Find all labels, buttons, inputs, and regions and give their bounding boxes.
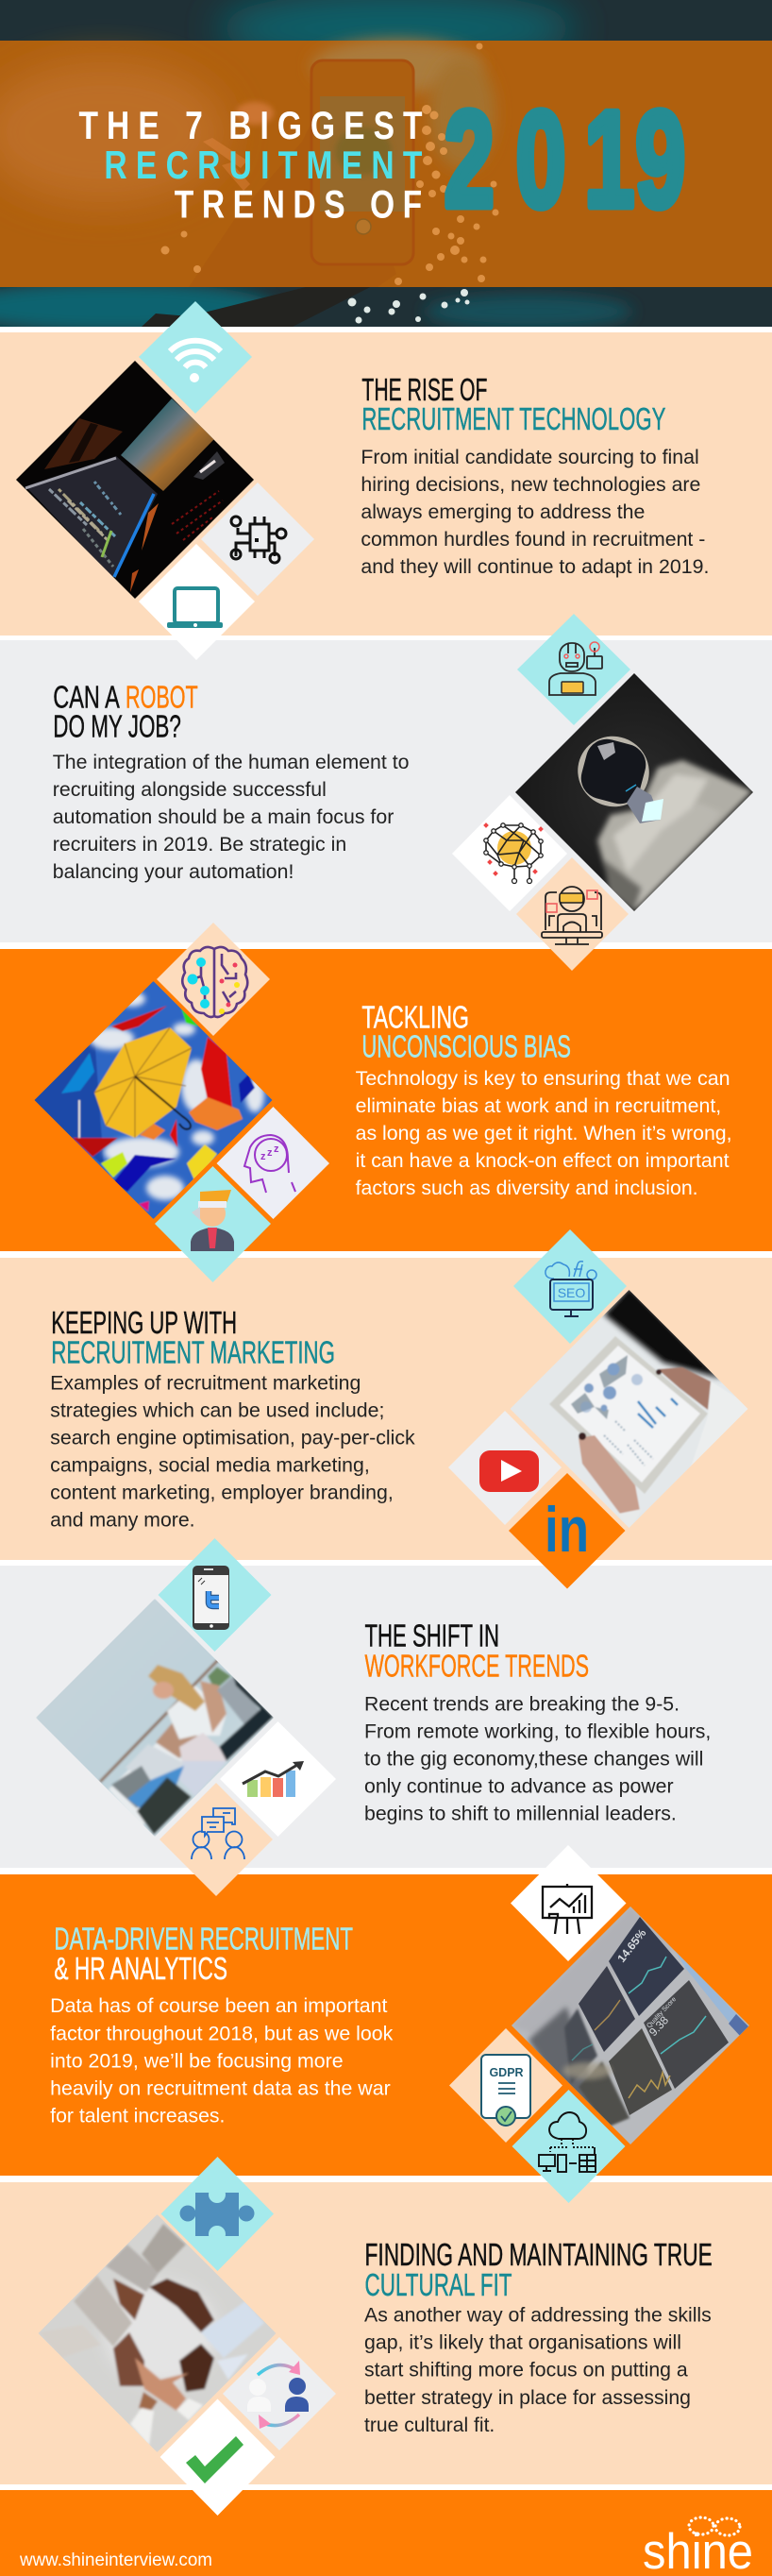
body text: factor throughout 2018, but as we look <box>50 2023 394 2044</box>
icon: sleeping head diamond: z <box>267 1147 273 1159</box>
section 7: finding and maintaining true cultural fit <box>38 2157 713 2516</box>
heading: UNCONSCIOUS BIAS <box>361 1029 571 1064</box>
photo: analytics dashboard: 9.38 <box>646 2013 671 2039</box>
photo: analytics dashboard: Quality Score <box>646 1996 678 2029</box>
heading <box>364 1618 589 1683</box>
icon: AI robot diamond <box>517 614 630 725</box>
heading: ROBOT <box>126 679 198 714</box>
icon: people talking diamond <box>159 1783 273 1896</box>
body text <box>50 1995 394 2127</box>
body text <box>50 1372 415 1532</box>
body text: From remote working, to flexible hours, <box>364 1720 711 1742</box>
body text: factors such as diversity and inclusion. <box>356 1178 698 1199</box>
icon: growth chart diamond <box>220 1721 336 1837</box>
body text: balancing your automation! <box>53 861 294 883</box>
heading <box>53 679 198 744</box>
body text: eliminate bias at work and in recruitment, <box>356 1095 721 1117</box>
title text <box>79 105 423 227</box>
section 6: data-driven recruitment and HR analytics <box>50 1845 750 2203</box>
body text: As another way of addressing the skills <box>364 2304 712 2327</box>
body text: hiring decisions, new technologies are <box>361 474 700 496</box>
body text: always emerging to address the <box>361 501 645 523</box>
body text: only continue to advance as power <box>364 1775 674 1797</box>
icon: SEO monitor diamond <box>513 1229 627 1344</box>
body text <box>364 2304 712 2436</box>
heading: WORKFORCE TRENDS <box>364 1648 589 1683</box>
body text: for talent increases. <box>50 2106 225 2127</box>
body text: heavily on recruitment data as the war <box>50 2077 391 2100</box>
heading: DO MY JOB? <box>53 709 181 744</box>
section 1: rise of recruitment technology <box>16 301 709 660</box>
icon: robot at monitor diamond <box>516 857 629 971</box>
icon: sleeping head diamond <box>217 1107 329 1219</box>
body text: From initial candidate sourcing to final <box>361 447 699 468</box>
panel background: section 6 <box>0 1874 772 2176</box>
section 2: can a robot do my job <box>53 614 753 971</box>
section 4: keeping up with recruitment marketing <box>50 1229 755 1588</box>
icon: phone with twitter diamond <box>159 1538 272 1652</box>
heading: & HR ANALYTICS <box>54 1951 227 1986</box>
icon: person swap diamond <box>223 2337 336 2450</box>
body text: as long as we get it right. When it’s wrong, <box>356 1123 732 1144</box>
body text: recruiters in 2019. Be strategic in <box>53 834 346 856</box>
orange overlay band <box>0 41 772 287</box>
icon: sleeping head diamond: z <box>274 1144 279 1155</box>
body text: recruiting alongside successful <box>53 779 327 801</box>
icon: brain diamond <box>157 923 270 1036</box>
body text: The integration of the human element to <box>53 752 410 773</box>
heading: CAN A <box>53 679 120 714</box>
icon: sleeping head diamond: z <box>260 1151 266 1162</box>
body text: better strategy in place for assessing <box>364 2387 691 2409</box>
icon: check mark diamond <box>160 2398 276 2516</box>
body text: begins to shift to millennial leaders. <box>364 1804 677 1824</box>
heading: DATA-DRIVEN RECRUITMENT <box>54 1921 353 1956</box>
body text: and many more. <box>50 1509 195 1532</box>
body text: to the gig economy,these changes will <box>364 1748 703 1770</box>
panel background: section 2 <box>0 640 772 942</box>
photo: laptop and code <box>16 361 254 599</box>
body text: true cultural fit. <box>364 2415 495 2436</box>
heading: CULTURAL FIT <box>364 2267 512 2302</box>
heading: THE SHIFT IN <box>364 1618 499 1653</box>
icon: neural network diamond <box>452 795 567 911</box>
body text: start shifting more focus on putting a <box>364 2360 688 2381</box>
heading <box>361 372 665 436</box>
panel background: section 3 <box>0 949 772 1251</box>
body text: common hurdles found in recruitment - <box>361 529 705 551</box>
title text: TRENDS OF <box>175 183 422 227</box>
icon: GDPR document diamond: GDPR <box>489 2066 524 2079</box>
icon: GDPR document diamond <box>449 2028 562 2143</box>
icon: blindfolded man diamond <box>155 1166 271 1282</box>
section 3: tackling unconscious bias <box>28 923 732 1282</box>
panel background: section 7 <box>0 2182 772 2484</box>
heading <box>54 1921 353 1986</box>
icon: YouTube diamond <box>448 1411 562 1525</box>
body text: Examples of recruitment marketing <box>50 1372 361 1394</box>
body text: into 2019, we’ll be focusing more <box>50 2050 344 2072</box>
photo: linked hands <box>38 2214 277 2452</box>
body text <box>361 447 709 578</box>
photo: analytics dashboard: 14.65% <box>614 1926 649 1965</box>
heading: THE RISE OF <box>361 372 487 407</box>
body text <box>356 1068 732 1199</box>
body text <box>53 752 410 883</box>
section 5: the shift in workforce trends <box>36 1538 711 1896</box>
icon: LinkedIn diamond <box>509 1473 625 1588</box>
heading: TACKLING <box>361 999 469 1035</box>
icon: presentation board diamond <box>511 1845 627 1961</box>
title text: THE 7 BIGGEST <box>79 105 423 148</box>
heading <box>51 1305 335 1370</box>
icon: wifi diamond <box>139 301 252 414</box>
photo: umbrellas <box>28 981 273 1219</box>
photo: tablet with charts <box>510 1286 755 1530</box>
body text: Data has of course been an important <box>50 1995 388 2017</box>
panel background: section 1 <box>0 332 772 636</box>
icon: LinkedIn diamond: in <box>545 1494 589 1566</box>
body text: gap, it’s likely that organisations will <box>364 2332 681 2354</box>
body text: Technology is key to ensuring that we can <box>356 1068 730 1090</box>
icon: SEO monitor diamond: SEO <box>558 1285 585 1300</box>
body text: and they will continue to adapt in 2019. <box>361 556 709 578</box>
icon: cloud network diamond <box>512 2090 625 2203</box>
website address: www.shineinterview.com <box>19 2551 212 2570</box>
heading: RECRUITMENT MARKETING <box>51 1335 335 1370</box>
icon: circuit chip diamond <box>201 483 314 596</box>
footer <box>19 2517 753 2576</box>
panel background: section 4 <box>0 1258 772 1560</box>
body text: strategies which can be used include; <box>50 1399 384 1421</box>
band image tint <box>0 40 498 287</box>
header banner <box>0 0 772 331</box>
body text: search engine optimisation, pay-per-click <box>50 1427 415 1449</box>
body text: automation should be a main focus for <box>53 806 394 828</box>
heading <box>364 2237 713 2302</box>
body text <box>364 1693 711 1824</box>
icon: puzzle piece diamond <box>160 2157 274 2271</box>
photo: robot <box>515 673 753 911</box>
photo: woman working on laptop <box>36 1599 274 1837</box>
heading <box>361 999 571 1064</box>
panel background: section 5 <box>0 1566 772 1868</box>
panel background: footer <box>0 2490 772 2576</box>
body text: campaigns, social media marketing, <box>50 1454 370 1476</box>
photo: analytics dashboard <box>511 1906 750 2145</box>
title text: RECRUITMENT <box>104 144 422 188</box>
header photo background <box>0 0 772 331</box>
body text: content marketing, employer branding, <box>50 1483 394 1503</box>
heading: KEEPING UP WITH <box>51 1305 237 1340</box>
title year 2019: 2019 <box>445 84 685 236</box>
icon: laptop diamond <box>139 544 255 660</box>
body text: Recent trends are breaking the 9-5. <box>364 1693 680 1715</box>
body text: it can have a knock-on effect on important <box>356 1150 730 1172</box>
